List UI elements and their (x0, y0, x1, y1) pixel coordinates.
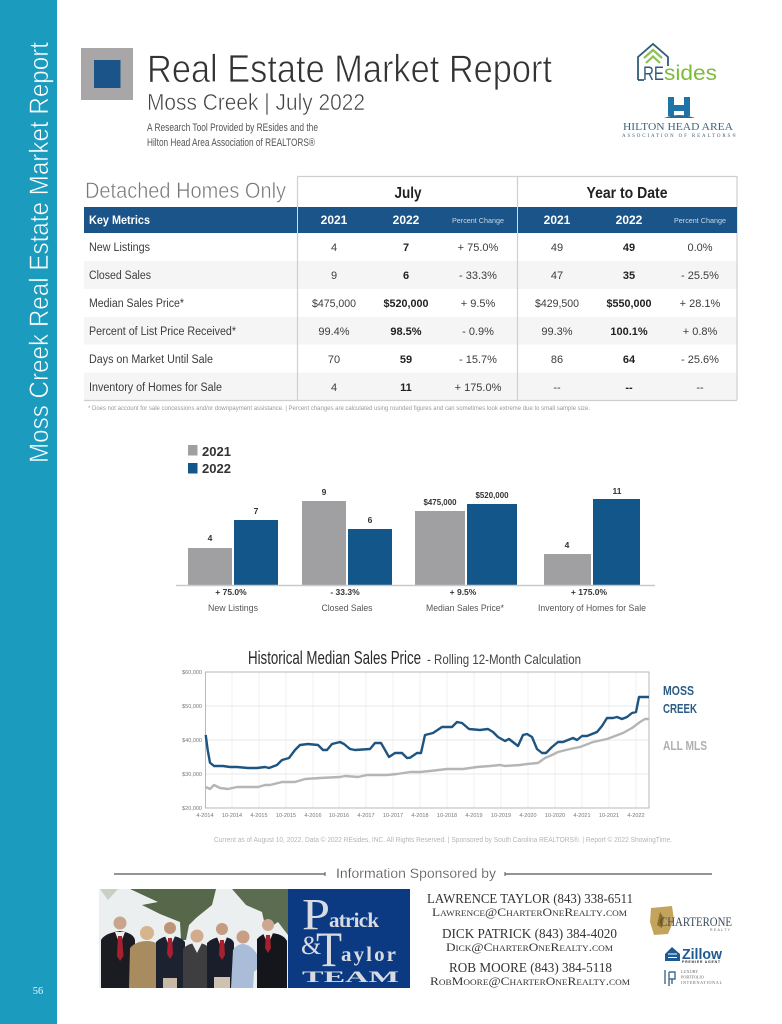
contact: Lawrence Taylor: Lawrence@CharterOneRealty.com (432, 907, 627, 919)
row: inventory: -- (553, 382, 561, 394)
table header row: 2021 (544, 213, 571, 227)
row: new listings: 0.0% (687, 242, 713, 254)
logo: Hilton Head Area: HILTON HEAD AREA (623, 121, 733, 133)
sponsor logo: Patrick and Taylor Team: T (316, 921, 342, 977)
person 5 (207, 923, 234, 988)
row: days on market: 70 (328, 354, 340, 366)
sponsor logo: Patrick and Taylor Team: P (302, 890, 330, 939)
row: days on market: 64 (623, 354, 636, 366)
x axis labels: 10-2015 (276, 813, 296, 819)
series label: Moss Creek: MOSS (663, 683, 694, 698)
logo: REsides: RE (643, 64, 664, 85)
sponsor heading (114, 866, 712, 881)
contact: Dick Patrick: DICK PATRICK (843) 384-4020 (442, 926, 617, 941)
row: new listings (89, 242, 713, 254)
line chart (182, 670, 649, 819)
x axis labels: 10-2021 (599, 813, 619, 819)
table heading: Year to Date: Year to Date (586, 185, 668, 202)
bars: new listings (188, 506, 278, 614)
logo: CharterOne: CHARTERONE (660, 914, 732, 929)
row: median sales price: $475,000 (312, 298, 356, 310)
logo: Luxury Portfolio International: INTERNATIONAL (681, 980, 722, 985)
bars: inventory: Inventory of Homes for Sale (538, 603, 646, 614)
x axis labels: 4-2018 (411, 813, 429, 819)
contact: Dick Patrick: Dick@CharterOneRealty.com (446, 942, 613, 954)
row: percent of list price: 99.4% (318, 326, 350, 338)
logo: Luxury Portfolio International (665, 969, 722, 986)
row: inventory: 11 (400, 382, 412, 394)
provider note (147, 122, 318, 149)
bars: inventory: 4 (565, 540, 570, 550)
table header row: 2022 (616, 213, 643, 227)
row: closed sales: 9 (331, 270, 337, 282)
sidebar title: Moss Creek Real Estate Market Report (24, 42, 54, 463)
footnote: * Does not account for sale concessions and/or downpayment assistance. | Percent changes are calculated using rounded figures and can sometimes look extreme due to small sample size. (88, 406, 590, 412)
row: new listings: New Listings (89, 242, 150, 254)
row: days on market (89, 354, 719, 366)
contact: Lawrence Taylor (427, 891, 633, 919)
chart title: Historical Median Sales Price (248, 648, 421, 668)
x axis labels: 10-2019 (491, 813, 511, 819)
x axis labels: 10-2017 (383, 813, 403, 819)
table header row: Percent Change (674, 216, 726, 225)
bars: new listings: + 75.0% (215, 587, 247, 597)
bars: closed sales: Closed Sales (322, 603, 373, 614)
panel: metrics table (84, 176, 737, 400)
y axis labels: $20,000 (182, 806, 202, 812)
logo: Zillow (665, 946, 722, 964)
row: median sales price: Median Sales Price* (89, 298, 184, 310)
row: new listings: 49 (623, 242, 635, 254)
series label: Moss Creek (663, 683, 697, 716)
contact: Rob Moore: RobMoore@CharterOneRealty.com (430, 976, 630, 988)
row: percent of list price: 100.1% (610, 326, 648, 338)
bars: closed sales: 6 (368, 515, 373, 525)
x axis labels (196, 813, 645, 819)
bars: new listings: New Listings (208, 603, 258, 614)
x axis labels: 4-2015 (250, 813, 268, 819)
bars: median sales price: + 9.5% (450, 587, 477, 597)
contact: Rob Moore: ROB MOORE (843) 384-5118 (449, 960, 612, 975)
bars: inventory: + 175.0% (571, 587, 608, 597)
bars: median sales price: $520,000 (476, 490, 509, 500)
logo: Luxury Portfolio International: LUXURY (681, 969, 698, 974)
chart title: - Rolling 12-Month Calculation (427, 651, 581, 667)
row: percent of list price (89, 326, 717, 338)
row: percent of list price: 99.3% (541, 326, 573, 338)
row: closed sales: Closed Sales (89, 270, 151, 282)
bar chart (176, 486, 655, 614)
row: percent of list price: - 0.9% (462, 326, 494, 338)
row: closed sales (89, 270, 719, 282)
row: closed sales: - 25.5% (681, 270, 719, 282)
row: days on market: - 25.6% (681, 354, 719, 366)
x axis labels: 4-2019 (465, 813, 483, 819)
row: median sales price: $429,500 (535, 298, 579, 310)
contact: Lawrence Taylor: LAWRENCE TAYLOR (843) 338-6511 (427, 891, 633, 906)
y axis labels: $50,000 (182, 704, 202, 710)
x axis labels: 4-2016 (304, 813, 322, 819)
table heading: July: July (394, 185, 422, 202)
legend (188, 445, 231, 476)
legend: 2022 (202, 462, 231, 476)
line: all MLS (206, 719, 649, 789)
person 4 (183, 930, 210, 988)
bars: closed sales: 9 (322, 487, 327, 497)
contact details (427, 891, 633, 988)
row: days on market: 59 (400, 354, 412, 366)
y axis labels: $60,000 (182, 670, 202, 676)
row: days on market: Days on Market Until Sale (89, 354, 213, 366)
logo: Hilton Head Area (622, 97, 736, 139)
person 1 (101, 916, 135, 988)
contact: Dick Patrick (442, 926, 617, 954)
subtitle: Moss Creek | July 2022 (147, 89, 365, 115)
bars: closed sales (302, 487, 392, 614)
row: closed sales: 35 (623, 270, 635, 282)
y axis labels: $40,000 (182, 738, 202, 744)
row: median sales price: + 9.5% (461, 298, 495, 310)
bars: inventory (538, 486, 646, 614)
row: median sales price: + 28.1% (680, 298, 721, 310)
logo: REsides: sides (664, 62, 717, 85)
row: percent of list price: Percent of List Price Received* (89, 326, 236, 338)
row: days on market: 86 (551, 354, 563, 366)
bars: median sales price: Median Sales Price* (426, 603, 504, 614)
bars: inventory: 11 (612, 486, 622, 496)
sidebar (0, 0, 57, 1024)
row: inventory: Inventory of Homes for Sale (89, 382, 222, 394)
row: median sales price: $520,000 (384, 298, 428, 310)
line: Moss Creek (206, 697, 649, 768)
row: closed sales: - 33.3% (459, 270, 497, 282)
sponsor logo: Patrick and Taylor Team: aylor (341, 942, 396, 966)
bars: median sales price (415, 490, 517, 614)
y axis labels (182, 670, 202, 812)
row: percent of list price: + 0.8% (683, 326, 717, 338)
row: inventory: + 175.0% (455, 382, 502, 394)
table header row (84, 207, 737, 233)
sponsor logo: Patrick and Taylor Team: & (301, 931, 321, 960)
bars: new listings: 7 (254, 506, 259, 516)
palm trees (100, 889, 288, 940)
row: median sales price: $550,000 (606, 298, 652, 310)
sponsor logo: Patrick and Taylor Team: TEAM (302, 969, 399, 986)
legend: 2021 (202, 445, 231, 459)
person 6 (231, 930, 262, 988)
row: inventory: -- (696, 382, 704, 394)
logo: CharterOne: REALTY (710, 928, 731, 932)
x axis labels: 4-2022 (627, 813, 645, 819)
bars: median sales price: $475,000 (424, 497, 457, 507)
provider note: A Research Tool Provided by REsides and the (147, 122, 318, 134)
row: new listings: 4 (331, 242, 337, 254)
page number: 56 (33, 986, 43, 997)
row: percent of list price: 98.5% (390, 326, 422, 338)
sponsor photo: team (99, 889, 288, 988)
row: inventory: -- (625, 382, 633, 394)
table header row: Key Metrics (89, 213, 150, 227)
row: inventory: 4 (331, 382, 337, 394)
table header row: 2021 (321, 213, 348, 227)
provider note: Hilton Head Area Association of REALTORS® (147, 137, 315, 149)
row: median sales price (89, 298, 721, 310)
person 3 (156, 922, 185, 988)
x axis labels: 10-2014 (222, 813, 242, 819)
logo: Luxury Portfolio International: PORTFOLIO (681, 974, 704, 980)
x axis labels: 10-2020 (545, 813, 565, 819)
icon: report square (81, 48, 133, 100)
bars: new listings: 4 (208, 533, 213, 543)
x axis labels: 4-2020 (519, 813, 537, 819)
x axis labels: 10-2018 (437, 813, 457, 819)
x axis labels: 4-2017 (357, 813, 375, 819)
row: inventory (89, 382, 704, 394)
sponsor heading: Information Sponsored by (336, 866, 496, 881)
logo: CharterOne (650, 906, 732, 935)
table header row: 2022 (393, 213, 420, 227)
x axis labels: 4-2014 (196, 813, 214, 819)
row: closed sales: 6 (403, 270, 409, 282)
x axis labels: 10-2016 (329, 813, 349, 819)
bars: closed sales: - 33.3% (330, 587, 360, 597)
person 7 (257, 919, 287, 988)
row: new listings: + 75.0% (458, 242, 499, 254)
series label: Moss Creek: CREEK (663, 701, 697, 716)
y axis labels: $30,000 (182, 772, 202, 778)
logo: REsides (638, 44, 717, 85)
sponsor logo: Patrick and Taylor Team: atrick (329, 908, 379, 932)
logo: Hilton Head Area: ASSOCIATION OF REALTORS® (622, 133, 736, 139)
data credit: Current as of August 10, 2022. Data © 2022 REsides, INC. All Rights Reserved. | Sponsored by South Carolina REALTORS®. | Report © 2022 ShowingTime. (214, 836, 672, 844)
x axis labels: 4-2021 (573, 813, 591, 819)
heading: detached homes only: Detached Homes Only (85, 178, 286, 203)
row: days on market: - 15.7% (459, 354, 497, 366)
contact: Rob Moore (430, 960, 630, 988)
person 2 (129, 926, 162, 988)
logo: Zillow: Zillow (682, 946, 722, 963)
series label: all MLS: ALL MLS (663, 738, 707, 753)
table header row: Percent Change (452, 216, 504, 225)
logo: Zillow: PREMIER AGENT (682, 960, 721, 964)
title: Real Estate Market Report (147, 48, 552, 91)
sponsor logo: Patrick and Taylor Team (288, 889, 410, 988)
row: new listings: 49 (551, 242, 563, 254)
row: closed sales: 47 (551, 270, 563, 282)
row: new listings: 7 (403, 242, 409, 254)
